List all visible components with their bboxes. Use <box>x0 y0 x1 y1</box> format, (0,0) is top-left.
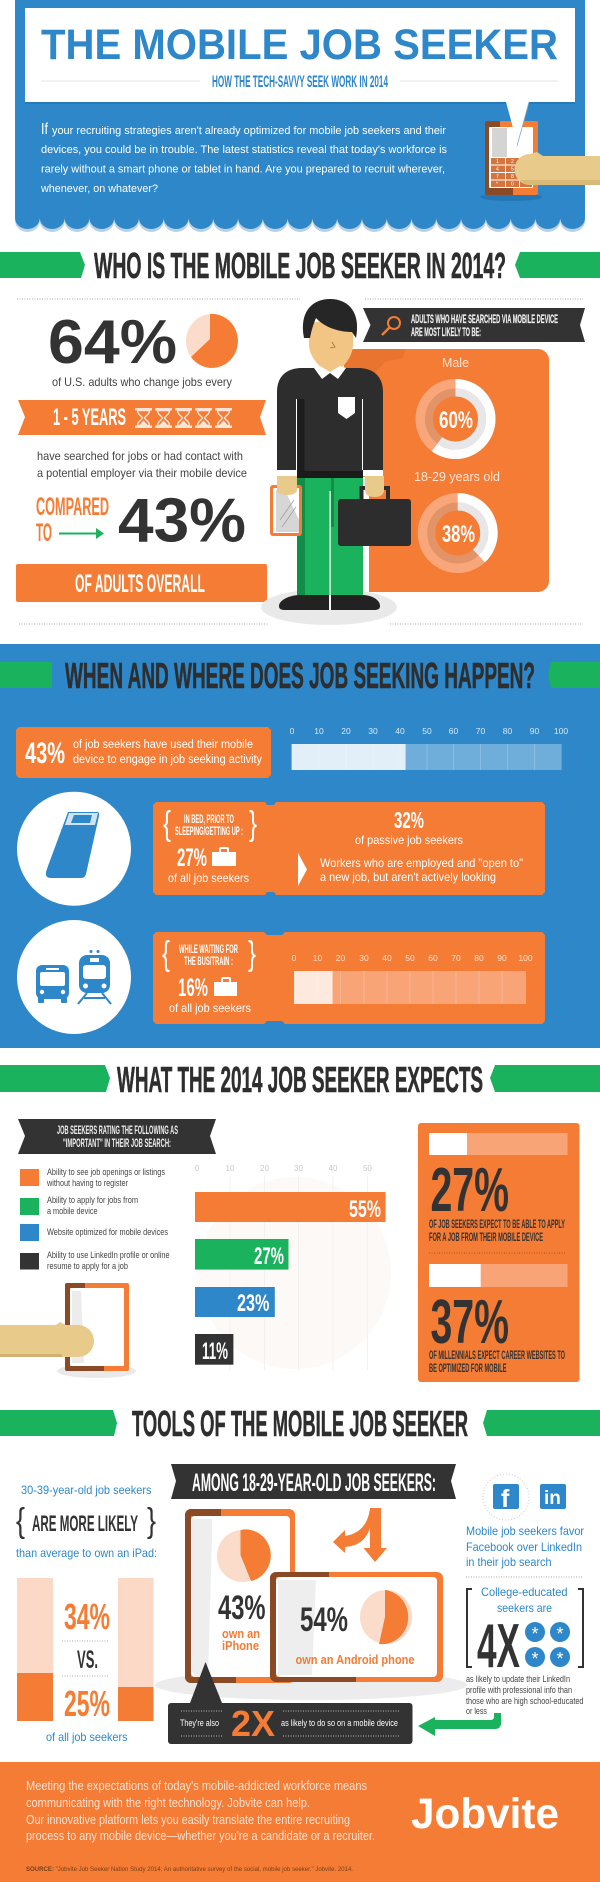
bar chart: 43 percent: 40 <box>395 726 405 736</box>
panel: social and education: in their job search <box>466 1555 552 1569</box>
text: have searched: have searched for jobs or had contact with <box>37 449 243 463</box>
panel: header <box>15 0 600 232</box>
donut chart: male 60 percent <box>420 384 490 454</box>
arrow: green left <box>418 1713 501 1736</box>
icon: phone in hand: 0 <box>511 182 514 188</box>
icon: asterisk circles <box>525 1622 570 1669</box>
bar chart: 16 percent: 80 <box>474 953 484 963</box>
ribbon: job seekers rating: "IMPORTANT" IN THEIR JOB SEARCH: <box>63 1136 171 1150</box>
intro paragraph: whenever, on whatever? <box>40 183 158 195</box>
panel: while waiting: } <box>248 935 256 973</box>
title box: THE MOBILE JOB SEEKER <box>41 21 558 69</box>
stat block: compared to 43 percent: COMPARED <box>36 493 109 521</box>
logo: Jobvite: Jobvite <box>411 1790 559 1838</box>
legend: resume to apply for a job <box>47 1261 128 1272</box>
bar chart: important features: 30 <box>294 1164 303 1173</box>
panel: while waiting: THE BUS/TRAIN : <box>184 954 233 968</box>
device: Android stat: 54% <box>300 1601 348 1639</box>
icon: phone in hand: 8 <box>511 174 514 180</box>
icon: briefcase <box>214 977 237 996</box>
tablet in hand <box>270 485 302 536</box>
icon: bus and train <box>17 920 131 1034</box>
text: have searched <box>37 449 247 480</box>
bar chart: 16 percent: 30 <box>359 953 369 963</box>
panel: social and education: profile with professional info than <box>466 1685 572 1695</box>
bar chart: 16 percent: 40 <box>382 953 392 963</box>
bar chart: important features: 40 <box>329 1164 338 1173</box>
callout: 2X likely: 2X <box>231 1703 275 1744</box>
bar chart: 43 percent: 20 <box>341 726 351 736</box>
bar chart: important features: 10 <box>226 1164 235 1173</box>
icon: asterisk circles: * <box>531 1624 539 1644</box>
icon: phone in hand <box>480 102 600 201</box>
device: iPhone stat <box>185 1509 295 1683</box>
legend: a mobile device <box>47 1206 98 1217</box>
stat block: 64 percent <box>48 308 238 389</box>
panel: in bed: { <box>163 805 171 843</box>
panel: iPad ownership: 30-39-year-old job seekers <box>21 1483 152 1497</box>
bar chart: 43 percent: 70 <box>476 726 485 736</box>
panel: in bed: of all job seekers <box>168 871 249 885</box>
callout: 2X likely <box>168 1662 412 1744</box>
panel: footer: process to any mobile device—whether you're a candidate or a recruiter. <box>26 1829 375 1843</box>
panel: in bed: of passive job seekers <box>355 833 463 847</box>
panel: in bed: SLEEPING/GETTING UP : <box>175 824 243 838</box>
bar chart: important features: 50 <box>363 1164 372 1173</box>
bar chart: 16 percent: 70 <box>451 953 461 963</box>
illustration: job seeker man <box>261 299 411 625</box>
donut chart: male 60 percent: 60% <box>439 407 473 434</box>
pie chart: 54 percent <box>360 1590 412 1644</box>
panel: social and education: Mobile job seekers favor <box>466 1524 584 1538</box>
panel: iPad ownership: VS. <box>77 1646 98 1674</box>
icon: magnifier <box>382 317 400 335</box>
bar chart: important features: 20 <box>260 1164 269 1173</box>
ribbon: 1-5 years: 1 - 5 YEARS <box>53 404 126 431</box>
icon: Facebook and LinkedIn <box>483 1474 566 1520</box>
panel: while waiting: of all job seekers <box>169 1001 251 1015</box>
ribbon: 1-5 years <box>18 400 266 435</box>
intro paragraph: devices, you could be in trouble. The latest statistics reveal that today's workforce is <box>41 144 447 156</box>
callout: 43 percent: device to engage in job seeking activity <box>73 754 262 766</box>
ribbon: job seekers rating: JOB SEEKERS RATING THE FOLLOWING AS <box>57 1123 178 1137</box>
bar chart: 16 percent: 0 <box>292 953 297 963</box>
ribbon: adults who have searched <box>363 308 585 342</box>
bar chart: 43 percent: 90 <box>530 726 539 736</box>
bar chart: 16 percent: 60 <box>428 953 438 963</box>
bar chart: 43 percent: 0 <box>290 726 295 736</box>
intro paragraph <box>40 121 447 195</box>
bar chart: 43 percent: 30 <box>368 726 378 736</box>
icon: phone in hand: 4 <box>496 166 499 172</box>
panel: iPad ownership <box>16 1483 157 1744</box>
panel: when and where <box>0 644 600 1048</box>
legend: Ability to apply for jobs from <box>47 1195 138 1206</box>
icon: phone in hand: 1 <box>496 159 499 165</box>
panel: in bed: } <box>249 805 257 843</box>
icon: tablet in hand <box>0 1283 136 1378</box>
panel: expectations stats: 37% <box>430 1288 509 1357</box>
progress bar: 27 percent <box>429 1133 568 1155</box>
icon: asterisk circles: * <box>556 1624 564 1644</box>
panel: in bed <box>153 802 545 895</box>
bar chart: 16 percent: 10 <box>313 953 322 963</box>
arrow: green right <box>59 528 104 539</box>
panel: social and education <box>418 1474 584 1736</box>
bar chart: 16 percent: 20 <box>336 953 345 963</box>
box: of adults overall: OF ADULTS OVERALL <box>75 570 205 598</box>
panel: iPad ownership: of all job seekers <box>46 1730 128 1744</box>
panel: footer: communicating with the right technology. Jobvite can help. <box>26 1796 310 1810</box>
panel: social and education: 4X <box>477 1612 520 1681</box>
icon: phone in hand: 2 <box>511 159 514 165</box>
ribbon: adults who have searched: ARE MOST LIKELY TO BE: <box>411 327 481 339</box>
callout: 2X likely: They're also <box>180 1718 219 1728</box>
panel: while waiting: 16% <box>178 974 208 1002</box>
panel: iPad ownership: } <box>147 1502 156 1540</box>
panel: in bed: a new job, but aren't actively looking <box>320 870 496 884</box>
panel: adults likely to be <box>344 349 549 593</box>
stat block: compared to 43 percent: 43% <box>118 486 246 556</box>
legend: without having to register <box>46 1178 128 1189</box>
stat block: compared to 43 percent: TO <box>36 519 52 547</box>
text: have searched: a potential employer via their mobile device <box>37 466 247 480</box>
legend: Website optimized for mobile devices <box>47 1227 168 1238</box>
legend <box>20 1167 170 1272</box>
panel: while waiting: { <box>162 935 170 973</box>
panel: in bed: 27% <box>177 844 207 872</box>
bar chart: 43 percent <box>290 726 568 770</box>
ribbon: among 18-29 <box>171 1464 456 1499</box>
panel: iPad ownership: 25% <box>64 1683 110 1724</box>
device: Android stat: own an Android phone <box>296 1653 415 1667</box>
icon: hourglasses <box>135 408 232 428</box>
icon: phone in hand: 5 <box>511 166 514 172</box>
bar chart: important features <box>195 1164 391 1370</box>
panel: iPad ownership: than average to own an iPad: <box>16 1546 157 1560</box>
icon: asterisk circles: * <box>556 1649 564 1669</box>
panel: in bed: Workers who are employed and "open to" <box>320 856 523 870</box>
panel: adults likely to be: 18-29 years old <box>414 469 500 484</box>
legend: Ability to see job openings or listings <box>47 1167 165 1178</box>
panel: expectations stats: BE OPTIMIZED FOR MOBILE <box>429 1361 506 1375</box>
bar chart: important features: 55% <box>349 1196 381 1223</box>
ribbon: job seekers rating <box>18 1119 216 1154</box>
icon: phone in hand: 7 <box>496 174 499 180</box>
panel: iPad ownership: ARE MORE LIKELY <box>32 1511 138 1536</box>
device: Android stat <box>270 1572 443 1682</box>
intro paragraph: your recruiting strategies aren't already optimized for mobile job seekers and their <box>52 125 446 137</box>
callout: 43 percent: 43% <box>25 737 65 770</box>
bar chart: 16 percent: 50 <box>405 953 415 963</box>
bar chart: important features: 23% <box>237 1290 270 1317</box>
bar chart: 43 percent: 10 <box>314 726 324 736</box>
bars <box>17 1578 154 1721</box>
stat block: 64 percent: 64% <box>48 308 177 377</box>
panel: in bed: 32% <box>394 807 424 833</box>
panel: while waiting: WHILE WAITING FOR <box>179 942 238 956</box>
panel: expectations stats <box>418 1123 580 1382</box>
panel: expectations stats: 27% <box>430 1156 509 1225</box>
donut chart: 18-29 38 percent: 38% <box>442 521 475 548</box>
panel: while waiting <box>153 932 545 1024</box>
bar chart: 16 percent <box>292 953 533 1004</box>
icon: phone in hand: * <box>496 182 498 188</box>
stat block: 64 percent: of U.S. adults who change jobs every <box>52 375 232 389</box>
box: of adults overall <box>16 564 267 602</box>
bar chart: 43 percent: 100 <box>554 726 568 736</box>
panel: social and education: Facebook over LinkedIn <box>466 1540 582 1554</box>
panel: social and education: or less <box>466 1706 487 1716</box>
device: iPhone stat: 43% <box>218 1589 266 1627</box>
icon: Facebook and LinkedIn: in <box>544 1488 561 1509</box>
panel: footer: Our innovative platform lets you easily translate the entire recruiting <box>26 1813 350 1827</box>
panel: in bed: IN BED, PRIOR TO <box>184 812 234 826</box>
panel: adults likely to be: Male <box>442 355 469 370</box>
bar chart: 16 percent: 90 <box>497 953 507 963</box>
bar chart: important features: 27% <box>254 1243 284 1270</box>
callout: 2X likely: as likely to do so on a mobile device <box>281 1718 398 1728</box>
device: iPhone stat: own an <box>222 1627 260 1641</box>
intro paragraph: If <box>41 121 48 138</box>
icon: briefcase <box>212 847 236 866</box>
callout: 43 percent <box>16 727 271 778</box>
title box: HOW THE TECH-SAVVY SEEK WORK IN 2014 <box>212 72 388 91</box>
panel: iPad ownership: { <box>16 1502 25 1540</box>
bar chart: 16 percent: 100 <box>518 953 533 963</box>
panel: footer <box>0 1762 600 1882</box>
intro paragraph: rarely without a smart phone or tablet in hand. Are you prepared to recruit wherever, <box>41 164 445 176</box>
bar chart: 43 percent: 50 <box>422 726 432 736</box>
bar chart: important features: 0 <box>195 1164 200 1173</box>
icon: bed <box>17 792 131 906</box>
briefcase <box>338 488 411 546</box>
panel: iPad ownership: 34% <box>64 1596 110 1637</box>
progress bar: 37 percent <box>429 1264 568 1287</box>
panel: social and education: as likely to update their LinkedIn <box>466 1674 570 1684</box>
icon: asterisk circles: * <box>531 1649 539 1669</box>
arrow: white right <box>298 853 307 886</box>
panel: social and education: College-educated <box>481 1585 568 1599</box>
bar chart: 43 percent: 80 <box>503 726 512 736</box>
legend: Ability to use LinkedIn profile or online <box>47 1250 170 1261</box>
icon: Facebook and LinkedIn: f <box>501 1485 510 1513</box>
stat block: compared to 43 percent <box>36 486 246 556</box>
title box <box>25 8 575 102</box>
device: iPhone stat: iPhone <box>222 1639 259 1653</box>
panel: social and education: seekers are <box>497 1601 552 1615</box>
pie chart: 64 percent <box>186 314 238 368</box>
arrow: split orange <box>333 1508 387 1562</box>
bar chart: 43 percent: 60 <box>449 726 458 736</box>
donut chart: 18-29 38 percent <box>423 498 493 568</box>
source: SOURCE: "Jobvite Job Seeker Nation Study 2014: An authoritative survey of the social, mobile job seeker." Jobvite. 2014. <box>26 1866 353 1873</box>
bar chart: important features: 11% <box>202 1338 228 1365</box>
panel: footer: Meeting the expectations of today's mobile-addicted workforce means <box>26 1779 367 1793</box>
callout: 43 percent: of job seekers have used their mobile <box>73 739 253 751</box>
pie chart: 43 percent <box>217 1529 271 1582</box>
